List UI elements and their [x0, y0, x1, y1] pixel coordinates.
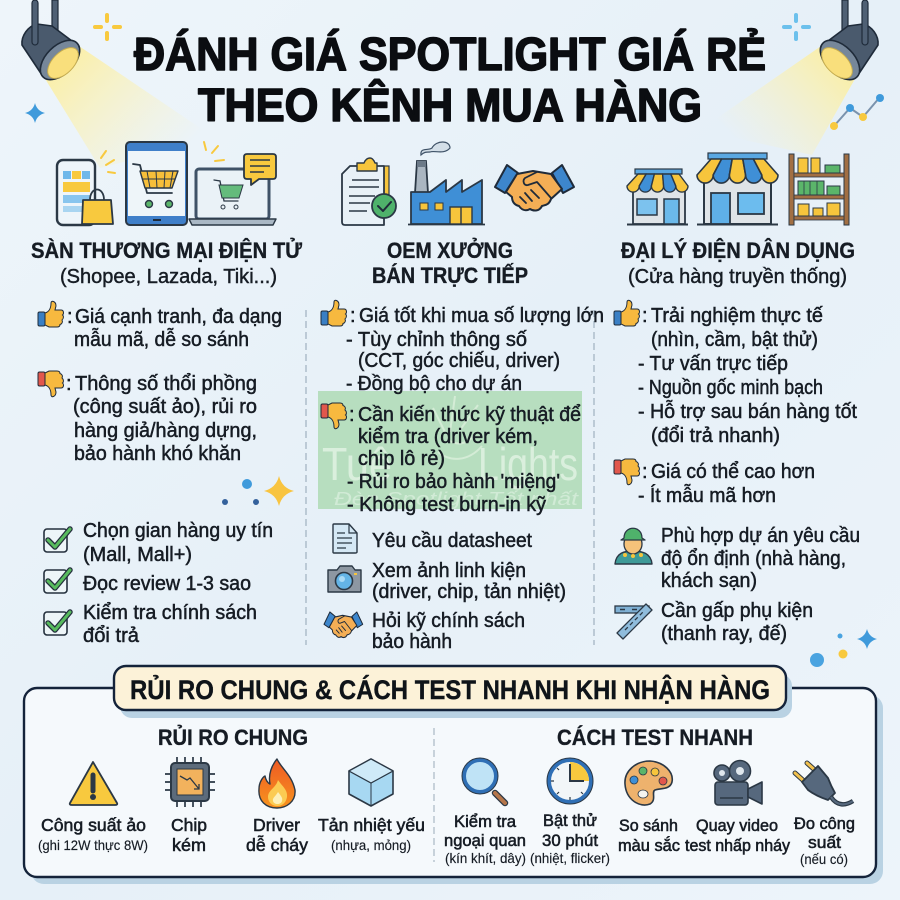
risk: fake wattage: Công suất ảo	[41, 815, 146, 835]
pros text: (đổi trả nhanh)	[651, 425, 780, 447]
pros text: :	[67, 306, 73, 328]
decoration: star and dots bottom right	[810, 629, 877, 667]
icon: thumbs down	[614, 459, 639, 485]
icon: camera	[328, 566, 361, 592]
icon: factory	[408, 142, 485, 224]
pros text: - Tư vấn trực tiếp	[638, 353, 788, 375]
test: 30 minute burn: (nhiệt, flicker)	[530, 850, 610, 866]
cons text	[347, 404, 581, 516]
text: suitable for projects: độ ổn định (nhà hàng,	[661, 548, 846, 570]
heading: common risks: RỦI RO CHUNG	[158, 725, 308, 750]
cons text: - Không test burn-in kỹ	[347, 494, 546, 516]
risk: bad chip: Chip	[171, 815, 207, 835]
cons text: - Ít mẫu mã hơn	[638, 484, 776, 507]
test: measure wattage: Đo công	[794, 815, 855, 833]
cons text: :	[349, 404, 355, 426]
cons text: kiểm tra (driver kém,	[358, 426, 538, 448]
text: component photos: (driver, chip, tản nhiệt)	[372, 581, 566, 603]
test: compare colours	[618, 761, 680, 855]
text: component photos: Xem ảnh linh kiện	[372, 560, 526, 582]
tip text 2: Đọc review 1-3 sao	[83, 573, 251, 595]
risk: bad chip	[165, 757, 215, 855]
icon: thumbs down	[321, 403, 346, 429]
icon: spotlight right	[813, 0, 878, 87]
watermark	[318, 391, 582, 509]
tip text 1: Chọn gian hàng uy tín	[83, 520, 273, 542]
icon: clipboard with check	[342, 158, 396, 225]
risk: bad chip: kém	[172, 835, 206, 855]
icon: thumbs up	[321, 300, 346, 326]
pros text: Trải nghiệm thực tế	[651, 305, 823, 327]
test: compare colours: So sánh	[619, 817, 678, 835]
icon: large shop	[697, 153, 778, 224]
icon: checkbox 2	[44, 570, 70, 593]
text: warranty: Hỏi kỹ chính sách	[372, 610, 525, 632]
cons text: :	[66, 373, 72, 395]
icon: thumbs up	[38, 301, 63, 327]
icon: checkbox 1	[44, 529, 70, 552]
cons text: Thông số thổi phồng	[75, 373, 257, 395]
pros text: Giá cạnh tranh, đa dạng	[75, 306, 282, 328]
title: ĐÁNH GIÁ SPOTLIGHT GIÁ RẺ	[134, 28, 766, 80]
panel: retail column	[614, 153, 860, 645]
cons text: :	[642, 461, 648, 483]
text: suitable for projects: Phù hợp dự án yêu cầu	[661, 525, 860, 547]
icon: tablet with cart	[126, 142, 187, 225]
icon: shelf	[789, 154, 849, 225]
test: compare colours: màu sắc	[618, 836, 680, 855]
heading: BÁN TRỰC TIẾP	[372, 263, 528, 288]
heading: quick test: CÁCH TEST NHANH	[557, 725, 753, 750]
watermark: Lights	[478, 438, 578, 490]
text: warranty	[372, 610, 525, 653]
test: flicker video	[685, 760, 791, 855]
tip text 3: đổi trả	[83, 625, 140, 647]
cons text: chip lô rẻ)	[358, 448, 445, 470]
pros text: Giá tốt khi mua số lượng lớn	[359, 305, 604, 327]
column dividers	[306, 310, 594, 645]
tip text 3: Kiểm tra chính sách	[83, 602, 257, 624]
spotlight beam: right	[700, 44, 856, 155]
text: request datasheet: Yêu cầu datasheet	[372, 530, 532, 552]
watermark: Tuệ	[322, 438, 392, 490]
cons text: bảo hành khó khăn	[74, 443, 241, 465]
pros text: (CCT, góc chiếu, driver)	[358, 350, 560, 372]
icon: phone and shopping bag	[57, 151, 115, 225]
panel: common risks and quick test	[24, 666, 883, 884]
test: measure wattage: (nếu có)	[800, 851, 848, 867]
subheading: (Shopee, Lazada, Tiki...)	[60, 265, 277, 288]
test: measure wattage	[794, 763, 855, 867]
risk: weak heat sink: Tản nhiệt yếu	[318, 815, 425, 835]
decoration: star and dots	[222, 476, 294, 506]
pros text: :	[642, 305, 648, 327]
pros text: mẫu mã, dễ so sánh	[74, 328, 249, 351]
cons text: Cần kiến thức kỹ thuật để	[358, 404, 581, 426]
pros text: (nhìn, cầm, bật thử)	[651, 329, 818, 351]
cons text: - Rủi ro bảo hành 'miệng'	[347, 471, 560, 493]
divider	[433, 728, 435, 862]
risk: driver burns	[246, 759, 308, 855]
spotlight beam: left	[44, 44, 215, 168]
icon: document	[333, 524, 357, 553]
test: visual inspection: ngoại quan	[444, 832, 526, 850]
risk: fake wattage	[38, 762, 148, 853]
text: suitable for projects	[661, 525, 860, 592]
tip text 3	[83, 602, 257, 647]
text: component photos	[372, 560, 566, 603]
tip text 1: (Mall, Mall+)	[83, 544, 192, 566]
test: visual inspection: (kín khít, dây)	[445, 850, 526, 866]
decoration: line chart	[830, 94, 884, 130]
banner	[114, 666, 792, 718]
risk: driver burns: Driver	[253, 815, 300, 835]
icon: track rails	[615, 604, 652, 639]
icon: thumbs down	[38, 371, 63, 397]
icon: spotlight left	[22, 0, 87, 87]
tip text 1	[83, 520, 273, 566]
icon: small handshake	[324, 612, 363, 638]
icon: laptop with cart and chat bubble	[189, 142, 276, 225]
pros text: - Tùy chỉnh thông số	[346, 329, 527, 351]
panel: OEM column	[321, 142, 604, 653]
cons text: Giá có thể cao hơn	[651, 461, 815, 483]
text: suitable for projects: khách sạn)	[661, 570, 757, 592]
icon: worker	[615, 528, 652, 564]
icon: thumbs up	[614, 300, 639, 326]
decoration: blue sparkle	[782, 13, 811, 41]
test: visual inspection: Kiểm tra	[454, 813, 517, 831]
banner: RỦI RO CHUNG & CÁCH TEST NHANH KHI NHẬN HÀNG	[130, 673, 770, 705]
icon: small shop	[627, 169, 688, 224]
pros text	[638, 305, 857, 447]
text: accessories: (thanh ray, đế)	[661, 623, 787, 645]
pros text: - Nguồn gốc minh bạch	[638, 377, 823, 399]
title: THEO KÊNH MUA HÀNG	[198, 79, 702, 131]
test: 30 minute burn	[530, 758, 610, 866]
risk: weak heat sink: (nhựa, mỏng)	[331, 837, 411, 853]
test: flicker video: test nhấp nháy	[685, 837, 791, 855]
decoration: blue star left	[25, 103, 45, 123]
text: warranty: bảo hành	[372, 631, 452, 653]
heading: OEM XƯỞNG	[387, 238, 513, 263]
text: accessories: Cần gấp phụ kiện	[661, 600, 813, 622]
icon: checkbox 3	[44, 612, 70, 635]
watermark: Đèn Spotlight Tốt nhất	[334, 489, 579, 509]
pros text	[67, 306, 282, 351]
title	[134, 28, 766, 131]
pros text: - Hỗ trợ sau bán hàng tốt	[638, 400, 857, 423]
risk: weak heat sink	[318, 759, 425, 853]
risk: driver burns: dễ cháy	[246, 834, 308, 855]
cons text: (công suất ảo), rủi ro	[73, 396, 257, 418]
cons text	[638, 461, 815, 507]
test: flicker video: Quay video	[696, 817, 778, 835]
decoration: yellow sparkle	[93, 13, 122, 41]
icon: handshake	[495, 165, 574, 211]
pros text	[346, 305, 604, 395]
text: accessories	[661, 600, 813, 645]
test: 30 minute burn: Bật thử	[543, 812, 597, 830]
heading	[372, 238, 528, 288]
pros text: - Đồng bộ cho dự án	[346, 373, 522, 395]
risk: fake wattage: (ghi 12W thực 8W)	[38, 837, 148, 853]
pros text: :	[350, 305, 356, 327]
cons text	[66, 373, 257, 465]
heading: ĐẠI LÝ ĐIỆN DÂN DỤNG	[621, 238, 855, 263]
test: 30 minute burn: 30 phút	[542, 832, 598, 850]
cons text: hàng giả/hàng dựng,	[74, 420, 257, 442]
test: measure wattage: suất	[808, 834, 841, 852]
subheading: (Cửa hàng truyền thống)	[628, 265, 847, 288]
panel: e-commerce column	[31, 142, 303, 647]
test: visual inspection	[444, 758, 526, 866]
heading: SÀN THƯƠNG MẠI ĐIỆN TỬ	[31, 238, 303, 263]
